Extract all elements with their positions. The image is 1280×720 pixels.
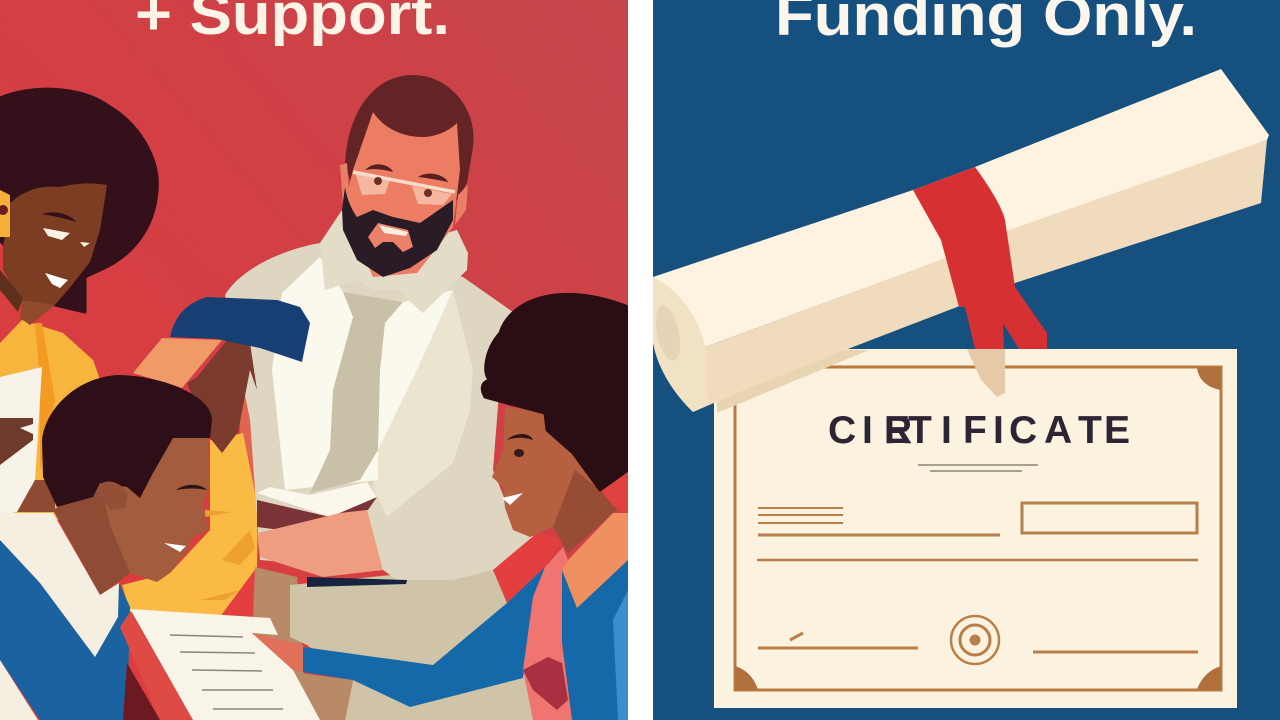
mentor shirt	[272, 257, 453, 490]
mentor tie	[310, 292, 403, 493]
figure: raised arm with blue cuff	[133, 297, 310, 453]
mentor trousers	[253, 567, 304, 686]
mentor collar	[320, 210, 468, 313]
mentor belt	[307, 577, 407, 587]
certificate corners	[735, 367, 1221, 690]
document held by student	[120, 609, 320, 720]
figure: woman on right with curly hair	[252, 294, 628, 720]
figure: yellow shirt	[122, 396, 262, 616]
her hair	[482, 294, 628, 490]
panel: left, funding plus support	[0, 0, 628, 720]
icon: rolled diploma scroll	[651, 69, 1269, 413]
certificate lines	[757, 465, 1198, 652]
figure: woman with curly hair	[0, 89, 157, 520]
panel: right, funding only	[651, 0, 1280, 720]
figure: mentor	[225, 75, 540, 720]
figure: student in blue with dark hair	[0, 375, 212, 720]
certificate title: CIERTIFICATE	[828, 409, 1130, 452]
ribbon	[913, 167, 1047, 349]
certificate seal	[951, 616, 999, 664]
ribbon tail over certificate	[967, 349, 1005, 397]
her clothing	[562, 560, 628, 720]
open book and hand	[257, 482, 383, 577]
mentor jacket	[225, 243, 537, 580]
her head	[492, 407, 617, 553]
panel: certificate	[714, 349, 1237, 708]
mentor head	[345, 75, 474, 200]
her arm	[303, 567, 545, 707]
